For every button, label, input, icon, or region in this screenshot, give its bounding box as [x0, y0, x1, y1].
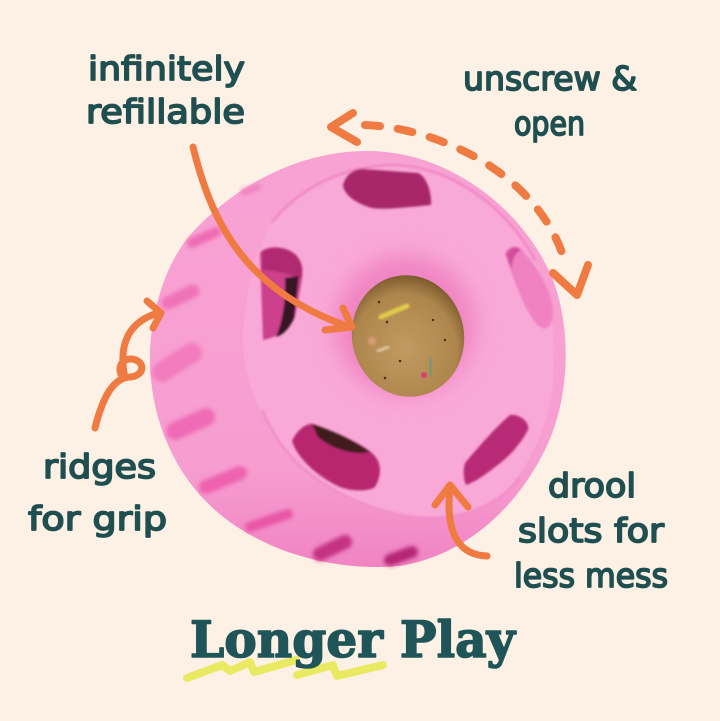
- label: drool slots for less mess: slots for: [518, 511, 664, 550]
- label: drool slots for less mess: less mess: [514, 556, 668, 595]
- title: Longer Play: [190, 610, 517, 669]
- title underline: [187, 660, 383, 678]
- arrow: drool slots: [435, 485, 487, 556]
- face: [243, 165, 554, 518]
- hole: lower right: [464, 415, 528, 485]
- hole: left: [260, 247, 303, 340]
- label: ridges for grip: [28, 447, 167, 538]
- hole: right: [505, 246, 553, 328]
- label: ridges for grip: for grip: [28, 499, 167, 538]
- arrow: ridges for grip: [95, 301, 161, 428]
- label: infinitely refillable: refillable: [86, 92, 245, 131]
- centre dimple: [335, 255, 475, 395]
- grip ridges: [162, 187, 412, 560]
- hole: right top shadow: [506, 248, 521, 270]
- face lower rim: [262, 410, 520, 518]
- hole: lower left: [292, 424, 380, 490]
- hole: top: [343, 169, 431, 209]
- label: drool slots for less mess: drool: [548, 466, 636, 505]
- face rim line: [272, 165, 535, 260]
- toy ball: [150, 151, 566, 567]
- label: unscrew and open: open: [514, 104, 585, 143]
- arrow: unscrew and open: [331, 113, 588, 295]
- label: unscrew and open: unscrew &: [463, 59, 637, 98]
- arrow: infinitely refillable: [193, 147, 352, 330]
- label: infinitely refillable: infinitely: [88, 49, 245, 88]
- label: infinitely refillable: [86, 49, 245, 131]
- label: unscrew and open: [463, 59, 637, 143]
- ball body: [150, 151, 566, 567]
- treat: [341, 265, 475, 407]
- label: drool slots for less mess: [514, 466, 668, 595]
- label: ridges for grip: ridges: [43, 447, 156, 486]
